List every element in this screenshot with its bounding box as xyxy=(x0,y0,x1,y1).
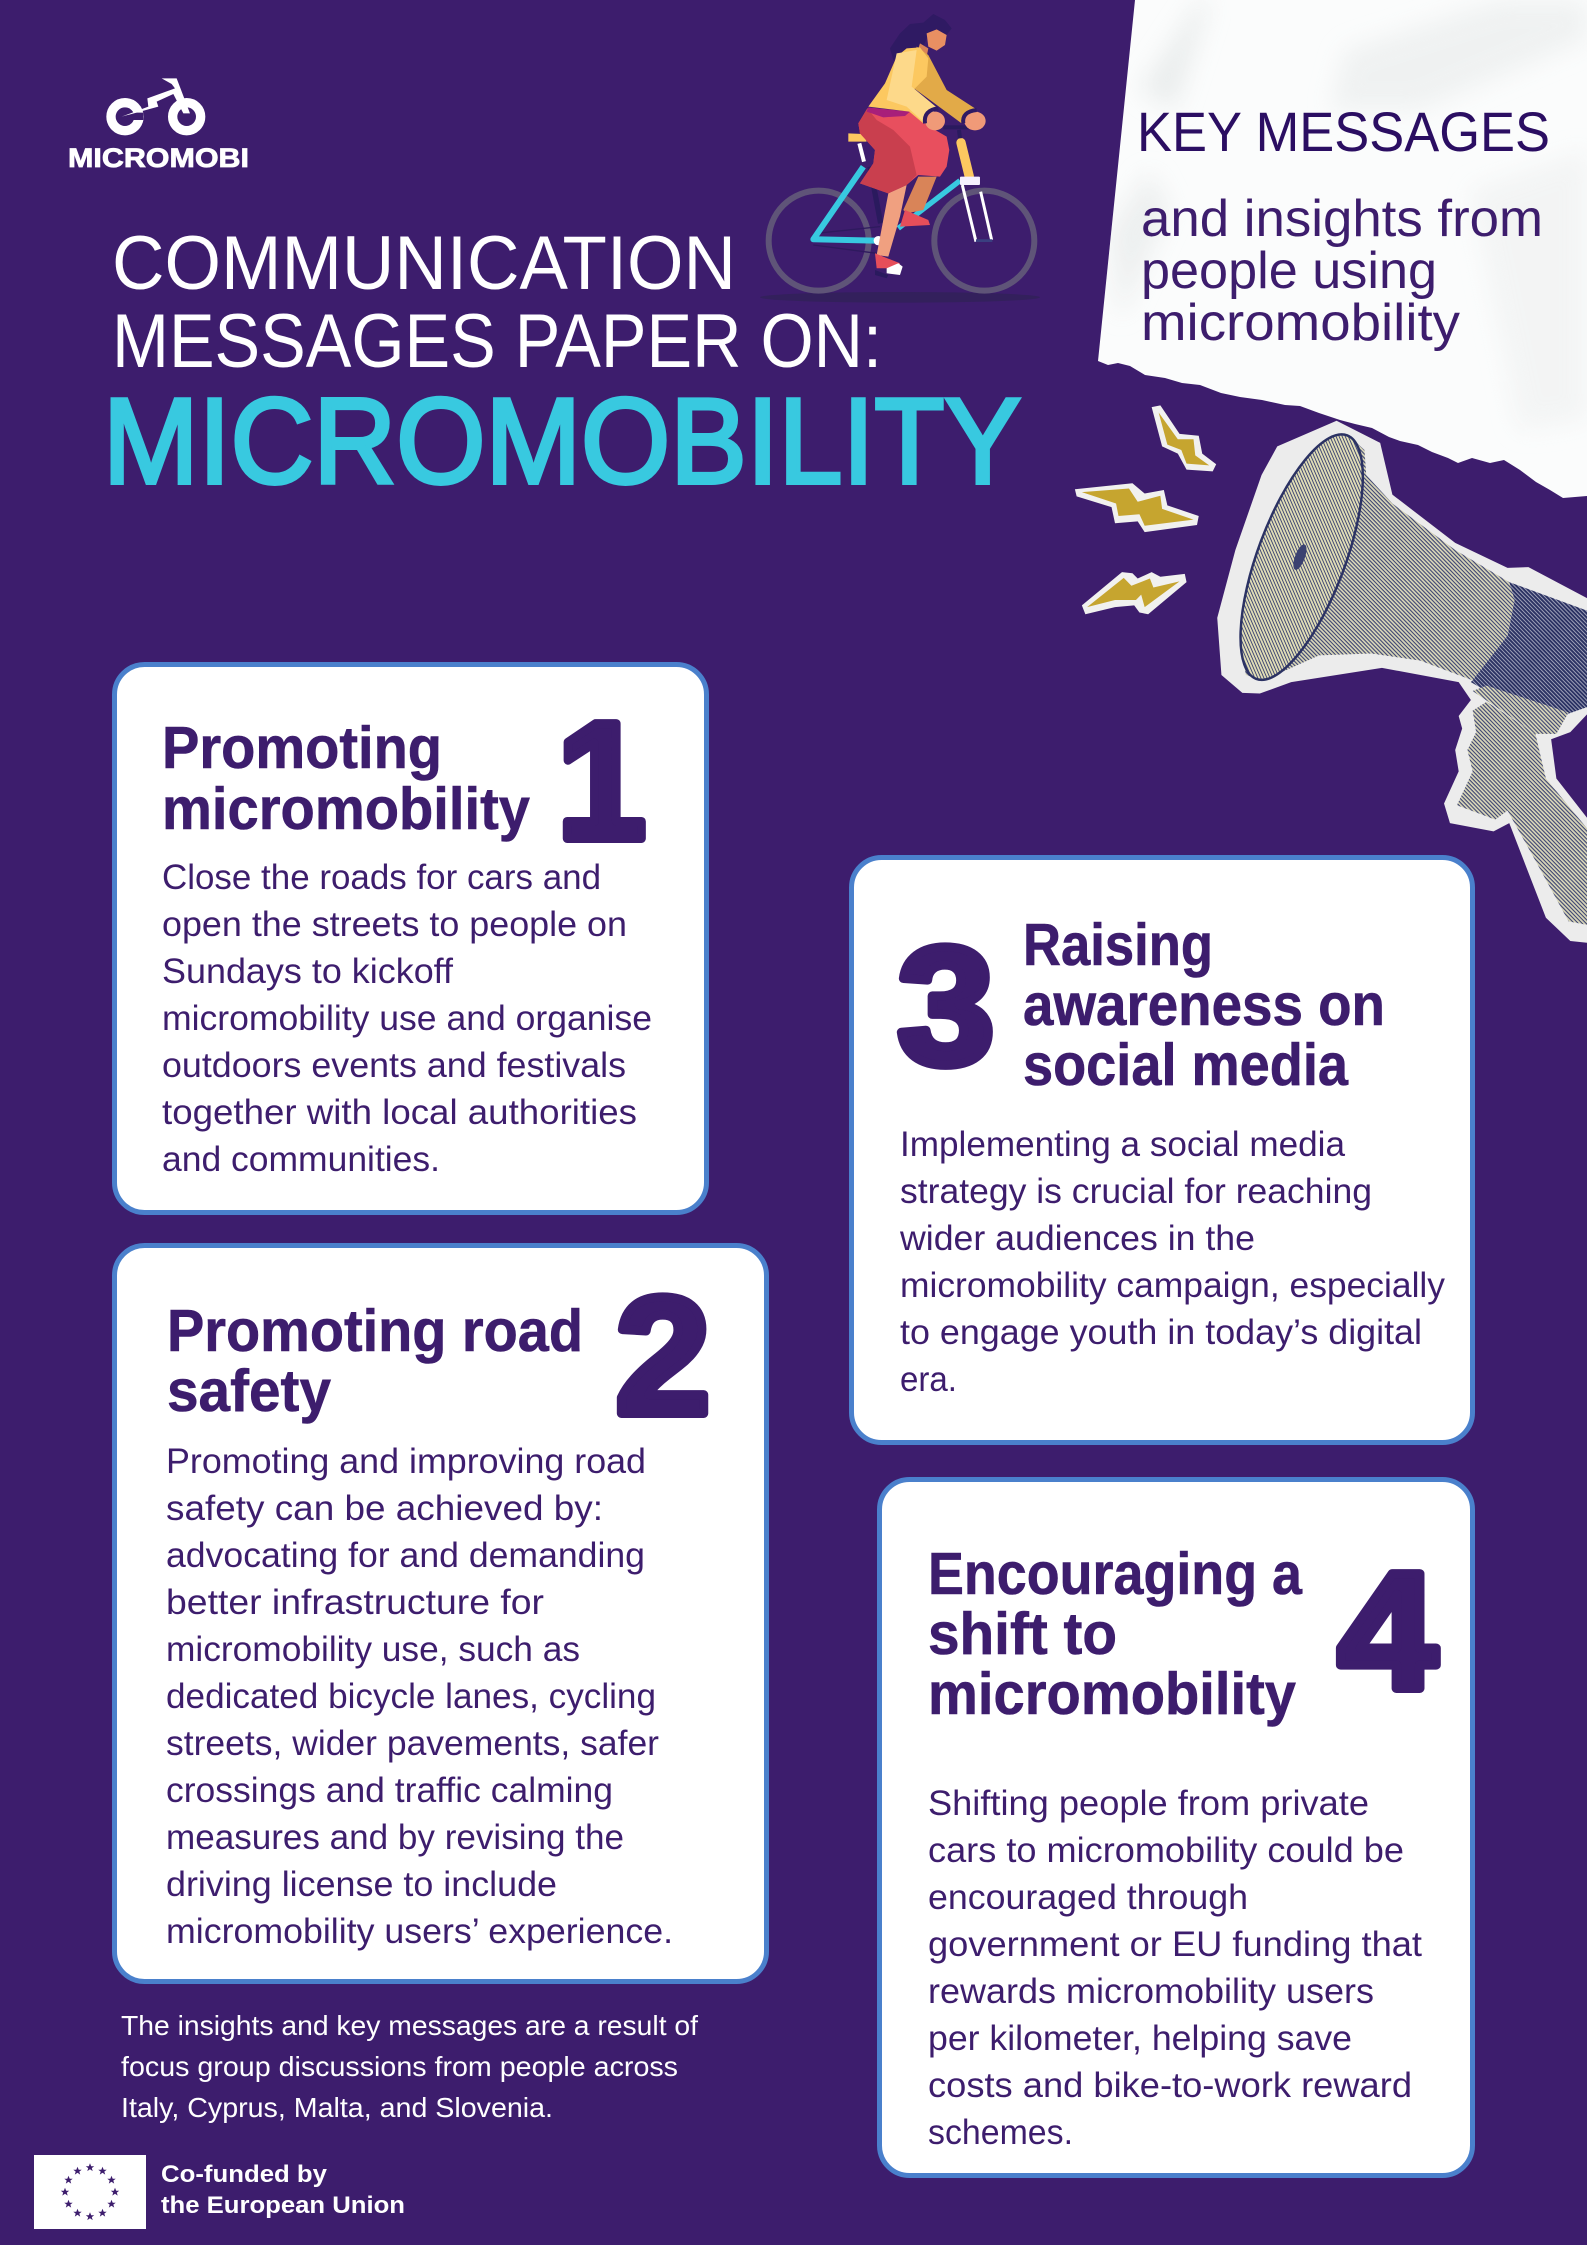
body text 1: micromobility use and organise xyxy=(162,999,652,1038)
title line 2: MESSAGES PAPER ON: xyxy=(112,299,882,384)
icon: EU flag xyxy=(34,2155,146,2229)
body text 2: measures and by revising the xyxy=(166,1818,624,1857)
body text 2: Promoting and improving road xyxy=(166,1442,646,1481)
title xyxy=(103,221,1021,509)
body text 2: better infrastructure for xyxy=(166,1583,544,1622)
panel: raising awareness on social media xyxy=(852,858,1472,1442)
body text 3 xyxy=(899,1125,1446,1399)
heading 2: Promoting road xyxy=(167,1298,583,1364)
body text 2: crossings and traffic calming xyxy=(166,1771,613,1810)
subheading xyxy=(1141,190,1543,352)
title line 1: COMMUNICATION xyxy=(112,221,736,306)
body text 1: open the streets to people on xyxy=(162,905,627,944)
icon: megaphone xyxy=(1215,419,1587,943)
heading 3: Raising xyxy=(1023,912,1213,978)
subheading: people using xyxy=(1141,242,1437,300)
number 4: 4 xyxy=(1338,1538,1437,1724)
body text 3: micromobility campaign, especially xyxy=(900,1266,1446,1305)
body text 4: Shifting people from private xyxy=(928,1784,1369,1823)
note: source of insights xyxy=(121,2010,698,2123)
body text 2: driving license to include xyxy=(166,1865,557,1904)
heading: key messages: KEY MESSAGES xyxy=(1137,100,1550,163)
note: source of insights: focus group discussions from people across xyxy=(121,2051,678,2082)
panel: promoting micromobility xyxy=(114,664,706,1212)
body text 2 xyxy=(166,1442,673,1951)
heading 4: micromobility xyxy=(928,1661,1296,1727)
heading 4: Encouraging a xyxy=(928,1541,1303,1607)
heading 3 xyxy=(1023,912,1385,1098)
heading 3: awareness on xyxy=(1023,972,1385,1038)
co-funded text: Co-funded by xyxy=(161,2161,328,2188)
body text 2: streets, wider pavements, safer xyxy=(166,1724,659,1763)
body text 4: schemes. xyxy=(928,2113,1073,2152)
body text 3: Implementing a social media xyxy=(900,1125,1346,1164)
heading 2: safety xyxy=(167,1358,331,1424)
body text 2: advocating for and demanding xyxy=(166,1536,645,1575)
logo wordmark: MICROMOBI xyxy=(68,143,249,173)
body text 1: Sundays to kickoff xyxy=(162,952,453,991)
body text 3: strategy is crucial for reaching xyxy=(900,1172,1372,1211)
subheading: and insights from xyxy=(1141,190,1543,248)
heading 1 xyxy=(162,715,530,842)
body text 1: outdoors events and festivals xyxy=(162,1046,626,1085)
heading 3: social media xyxy=(1023,1032,1349,1098)
icon: bike xyxy=(111,78,201,131)
body text 3: to engage youth in today’s digital xyxy=(900,1313,1422,1352)
body text 4: costs and bike-to-work reward xyxy=(928,2066,1412,2105)
body text 4: rewards micromobility users xyxy=(928,1972,1374,2011)
heading 2 xyxy=(167,1298,583,1424)
body text 3: wider audiences in the xyxy=(899,1219,1255,1258)
title main word: MICROMOBILITY xyxy=(103,373,1021,509)
note: source of insights: The insights and key messages are a result of xyxy=(121,2010,698,2041)
heading 1: Promoting xyxy=(162,715,442,781)
body text 2: safety can be achieved by: xyxy=(166,1489,603,1528)
co-funded text xyxy=(161,2161,405,2219)
body text 2: micromobility users’ experience. xyxy=(166,1912,673,1951)
body text 4 xyxy=(928,1784,1422,2152)
note: source of insights: Italy, Cyprus, Malta, and Slovenia. xyxy=(121,2092,553,2123)
heading 1: micromobility xyxy=(162,776,530,842)
body text 2: dedicated bicycle lanes, cycling xyxy=(166,1677,656,1716)
body text 1: Close the roads for cars and xyxy=(162,858,601,897)
body text 1 xyxy=(162,858,652,1179)
heading 4: shift to xyxy=(928,1601,1117,1667)
key messages text xyxy=(1137,100,1550,352)
torn paper header xyxy=(1090,0,1587,500)
body text 4: cars to micromobility could be xyxy=(928,1831,1404,1870)
subheading: micromobility xyxy=(1141,294,1460,352)
body text 4: per kilometer, helping save xyxy=(928,2019,1352,2058)
number 2: 2 xyxy=(616,1264,710,1450)
heading 4 xyxy=(928,1541,1303,1727)
panel: promoting road safety xyxy=(114,1246,766,1982)
body text 4: government or EU funding that xyxy=(928,1925,1422,1964)
body text 4: encouraged through xyxy=(928,1878,1248,1917)
number 1: 1 xyxy=(557,688,646,874)
icons: lightning bolts xyxy=(1075,405,1216,614)
illustration: woman cycling xyxy=(760,14,1040,303)
body text 2: micromobility use, such as xyxy=(166,1630,580,1669)
number 3: 3 xyxy=(898,914,994,1100)
body text 1: together with local authorities xyxy=(162,1093,637,1132)
co-funded text: the European Union xyxy=(161,2192,405,2219)
body text 3: era. xyxy=(900,1360,957,1399)
panel: encouraging a shift to micromobility xyxy=(880,1480,1472,2176)
logo: Micromobi xyxy=(68,78,249,173)
body text 1: and communities. xyxy=(162,1140,440,1179)
